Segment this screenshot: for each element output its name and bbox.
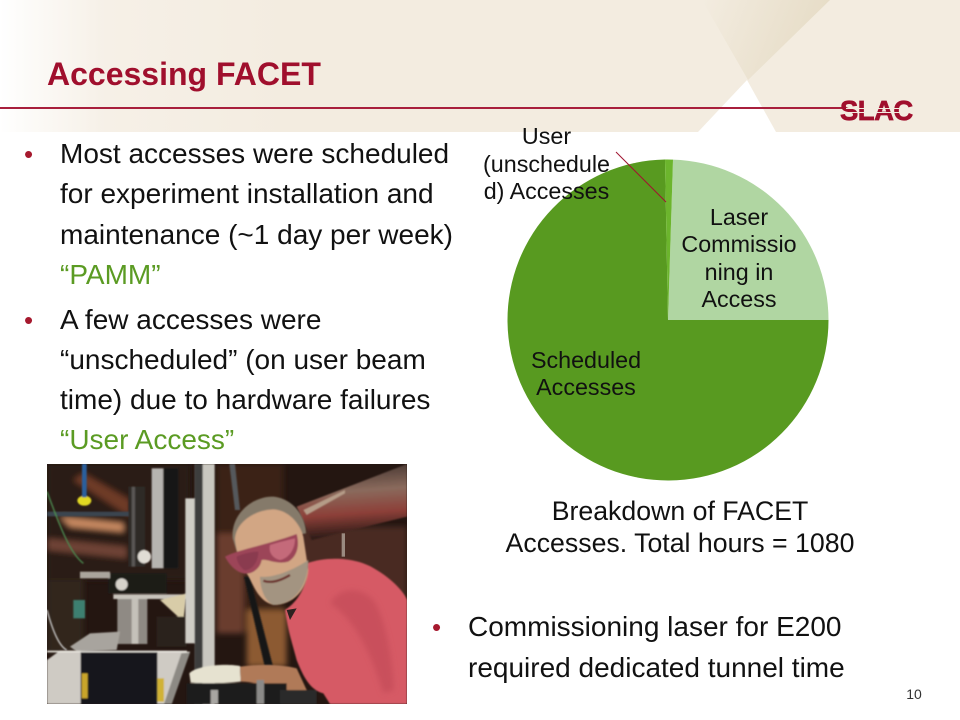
pie label: laser commissioning: Access (701, 286, 777, 312)
apparatus (47, 464, 188, 652)
page number: 10 (906, 686, 922, 702)
title: Accessing FACET (47, 56, 321, 92)
chart caption (506, 496, 854, 558)
frame post (185, 464, 283, 704)
chart caption: Accesses. Total hours = 1080 (506, 528, 854, 558)
pie label: scheduled accesses: Scheduled (531, 347, 641, 373)
pie label: laser commissioning: ning in (705, 259, 773, 285)
bullet: unscheduled accesses: “User Access” (60, 424, 234, 455)
pie label: scheduled accesses (531, 347, 641, 400)
pie chart (508, 160, 828, 480)
header background band (33, 0, 960, 132)
bullet: unscheduled accesses: A few accesses were (60, 304, 321, 335)
head (225, 497, 308, 605)
pie label: laser commissioning: Laser (710, 204, 768, 230)
bullet: scheduled accesses (24, 138, 453, 290)
bullet list: left column (24, 138, 453, 455)
tray (47, 651, 190, 704)
bullet: scheduled accesses: maintenance (~1 day per week) (60, 219, 453, 250)
bullet: unscheduled accesses (24, 304, 430, 455)
pie label: user unscheduled: d) Accesses (484, 178, 609, 204)
pie label: laser commissioning: Commissio (681, 231, 797, 257)
arm and glove (187, 665, 317, 704)
slice: user unscheduled (665, 159, 673, 320)
pie label: user unscheduled (483, 123, 610, 204)
bullet: commissioning laser: Commissioning laser for E200 (468, 611, 842, 642)
slice: laser commissioning (668, 160, 828, 320)
chart caption: Breakdown of FACET (552, 496, 808, 526)
pie label: user unscheduled: (unschedule (483, 150, 610, 176)
bullet: scheduled accesses: Most accesses were scheduled (60, 138, 449, 169)
bullet: commissioning laser: • (432, 612, 441, 642)
photo: researcher wearing laser goggles in the tunnel (47, 464, 407, 704)
shirt (285, 559, 407, 704)
bullet: scheduled accesses: • (24, 139, 33, 169)
slice: scheduled accesses (508, 160, 828, 480)
header rule (0, 107, 845, 109)
bullet: scheduled accesses: “PAMM” (60, 259, 161, 290)
bullet: scheduled accesses: for experiment installation and (60, 178, 434, 209)
pie label: scheduled accesses: Accesses (536, 374, 636, 400)
bullet: unscheduled accesses: time) due to hardware failures (60, 384, 430, 415)
bullet: unscheduled accesses: “unscheduled” (on user beam (60, 344, 426, 375)
bullet: commissioning laser (432, 611, 845, 683)
leader line (616, 152, 666, 202)
bullet: commissioning laser: required dedicated tunnel time (468, 652, 845, 683)
pie label: laser commissioning (681, 204, 797, 312)
bullet: unscheduled accesses: • (24, 305, 33, 335)
pie label: user unscheduled: User (522, 123, 571, 149)
